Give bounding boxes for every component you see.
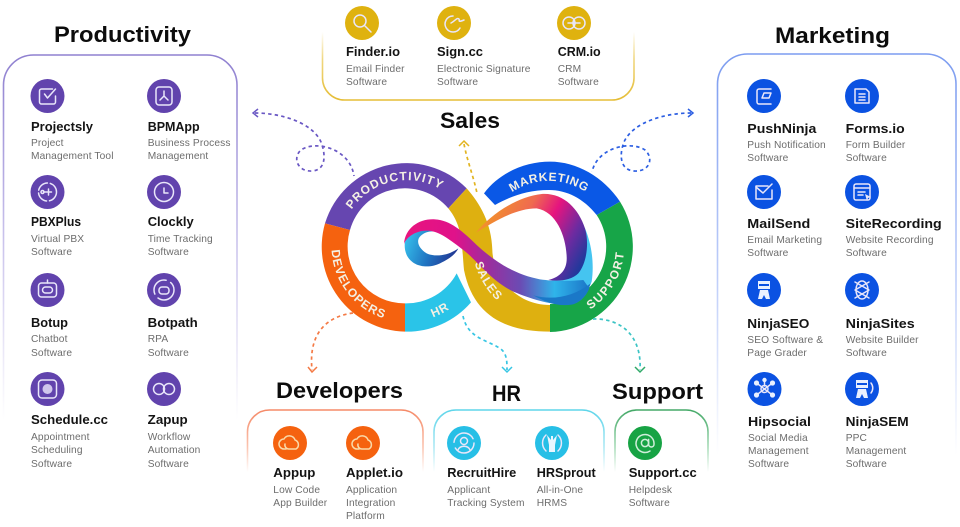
ribbon: crossing band: [404, 219, 589, 305]
icon: Applet.io: [346, 426, 380, 460]
icon: PBXPlus: [30, 175, 64, 209]
label: HR: HR: [430, 303, 449, 318]
item: Schedule.cc: Software: [31, 459, 72, 470]
icon: Appup: [273, 426, 307, 460]
item: Clockly: Software: [148, 247, 189, 258]
item: MailSend: [747, 175, 822, 259]
item: Zapup: Automation: [148, 445, 200, 456]
icon: Botup: [30, 273, 64, 307]
item: Botup: Chatbot: [31, 334, 68, 345]
item: Projectsly: Project: [31, 138, 64, 149]
arrow: to Sales: [459, 141, 477, 193]
item: Support.cc: Software: [629, 498, 670, 509]
item: Schedule.cc: Schedule.cc: [31, 412, 108, 427]
item: Botpath: [147, 273, 198, 359]
item: Projectsly: Projectsly: [31, 119, 94, 134]
heading: Developers: Developers: [276, 378, 403, 403]
item: NinjaSEM: [845, 372, 909, 470]
item: Hipsocial: Social Media: [748, 433, 808, 444]
item: NinjaSEO: Page Grader: [747, 348, 807, 359]
item: Zapup: Workflow: [148, 432, 191, 443]
item: Appup: Appup: [273, 465, 315, 480]
segment: Developers: [322, 223, 405, 332]
panel: Support: [615, 410, 708, 509]
item: CRM.io: CRM.io: [558, 44, 601, 59]
item: RecruitHire: RecruitHire: [447, 465, 516, 480]
icon: Botpath: [147, 273, 181, 307]
item: PushNinja: Push Notification: [747, 140, 826, 151]
icon: BPMApp: [147, 79, 181, 113]
ribbon: lower shadow: [533, 283, 591, 305]
icon: RecruitHire: [447, 426, 481, 460]
icon: Finder.io: [345, 6, 379, 40]
icon: Zapup: [147, 372, 181, 406]
icon: Projectsly: [30, 79, 64, 113]
item: MailSend: Email Marketing: [747, 235, 822, 246]
item: BPMApp: [147, 79, 231, 162]
panel: Productivity: [4, 55, 237, 470]
arrow: to Developers: [308, 313, 353, 372]
item: Zapup: [147, 372, 200, 470]
item: MailSend: Software: [747, 248, 789, 259]
item: Schedule.cc: [30, 372, 108, 470]
item: NinjaSEM: Management: [846, 446, 906, 457]
item: Sign.cc: Electronic Signature: [437, 64, 531, 75]
item: NinjaSEM: PPC: [846, 433, 867, 444]
item: Schedule.cc: Scheduling: [31, 445, 83, 456]
heading: Productivity: Productivity: [54, 22, 192, 47]
icon: NinjaSites: [845, 273, 879, 307]
icon: SiteRecording: [845, 175, 879, 209]
item: HRSprout: All-in-One: [537, 485, 583, 496]
item: Sign.cc: [437, 6, 531, 88]
icon: Support.cc: [628, 426, 662, 460]
item: Botup: Botup: [31, 315, 68, 330]
item: HRSprout: HRMS: [537, 498, 567, 509]
item: Botup: [30, 273, 72, 359]
panel: Developers: [248, 410, 423, 522]
icon: CRM.io: [557, 6, 591, 40]
icon: Schedule.cc: [30, 372, 64, 406]
panel: Marketing: [718, 54, 956, 470]
item: Sign.cc: Software: [437, 77, 478, 88]
item: SiteRecording: Software: [846, 248, 887, 259]
item: Clockly: [147, 175, 213, 258]
item: Applet.io: [346, 426, 403, 522]
item: MailSend: MailSend: [747, 216, 810, 231]
item: CRM.io: Software: [558, 77, 599, 88]
item: Applet.io: Applet.io: [346, 465, 403, 480]
item: Forms.io: Form Builder: [846, 140, 906, 151]
icon: Hipsocial: [748, 372, 782, 406]
icon: NinjaSEM: [845, 372, 879, 406]
item: PushNinja: [747, 79, 826, 164]
item: Support.cc: Helpdesk: [629, 485, 673, 496]
item: Finder.io: [345, 6, 405, 88]
icon: Sign.cc: [437, 6, 471, 40]
item: Forms.io: [845, 79, 906, 164]
item: NinjaSites: Software: [846, 348, 887, 359]
item: Appup: Low Code: [273, 485, 320, 496]
label: MARKETING: MARKETING: [508, 172, 588, 192]
item: PBXPlus: [30, 175, 84, 258]
item: PBXPlus: Software: [31, 247, 72, 258]
infinity loop graphic: [322, 162, 633, 332]
ribbon: left curl: [405, 227, 458, 266]
item: Forms.io: Software: [846, 153, 887, 164]
label: SUPPORT: SUPPORT: [586, 252, 624, 308]
item: SiteRecording: [845, 175, 942, 259]
item: NinjaSites: NinjaSites: [846, 316, 915, 331]
item: RecruitHire: Tracking System: [447, 498, 525, 509]
segment: Sales: [448, 188, 550, 332]
ribbon: right outer edge: [527, 228, 593, 294]
item: NinjaSEO: NinjaSEO: [747, 316, 809, 331]
item: SiteRecording: SiteRecording: [846, 216, 942, 231]
item: Forms.io: Forms.io: [846, 121, 905, 136]
item: NinjaSites: Website Builder: [846, 335, 919, 346]
item: Hipsocial: Management: [748, 446, 809, 457]
item: RecruitHire: Applicant: [447, 485, 490, 496]
label: PRODUCTIVITY: PRODUCTIVITY: [346, 172, 444, 209]
segment: Productivity: [325, 163, 467, 230]
panel: HR: [434, 410, 604, 509]
item: CRM.io: CRM: [558, 64, 581, 75]
icon: PushNinja: [747, 79, 781, 113]
heading: HR: HR: [492, 381, 521, 406]
segment: Support: [550, 202, 633, 332]
item: Support.cc: [628, 426, 697, 509]
item: RecruitHire: [447, 426, 525, 509]
arrow: to HR: [463, 316, 512, 372]
item: Hipsocial: Software: [748, 459, 789, 470]
item: Hipsocial: [748, 372, 811, 470]
item: PushNinja: PushNinja: [747, 121, 817, 136]
item: BPMApp: Management: [148, 151, 208, 162]
item: Finder.io: Email Finder: [346, 64, 405, 75]
item: NinjaSEM: NinjaSEM: [846, 414, 909, 429]
icon: Forms.io: [845, 79, 879, 113]
icon: NinjaSEO: [747, 273, 781, 307]
item: HRSprout: [535, 426, 596, 509]
item: PBXPlus: PBXPlus: [31, 214, 81, 229]
arrow: to Productivity: [253, 109, 354, 176]
item: Botup: Software: [31, 348, 72, 359]
item: Botpath: Software: [148, 348, 189, 359]
arrow: to Marketing: [592, 109, 693, 172]
icon: Clockly: [147, 175, 181, 209]
item: PushNinja: Software: [747, 153, 789, 164]
item: Applet.io: Integration: [346, 498, 395, 509]
item: Clockly: Time Tracking: [148, 234, 213, 245]
item: Finder.io: Software: [346, 77, 387, 88]
item: Applet.io: Platform: [346, 511, 385, 522]
item: Botpath: Botpath: [148, 315, 198, 330]
arrow: to Support: [593, 319, 645, 372]
item: Zapup: Software: [148, 459, 189, 470]
item: SiteRecording: Website Recording: [846, 235, 934, 246]
item: Schedule.cc: Appointment: [31, 432, 90, 443]
item: CRM.io: [557, 6, 601, 88]
item: NinjaSEO: SEO Software &: [747, 335, 823, 346]
label: DEVELOPERS: DEVELOPERS: [332, 250, 385, 318]
segment: HR: [405, 273, 471, 332]
label: SALES: SALES: [475, 262, 502, 300]
ribbon: right loop: [476, 194, 587, 281]
item: NinjaSites: [845, 273, 919, 359]
item: NinjaSEM: Software: [846, 459, 887, 470]
item: Applet.io: Application: [346, 485, 397, 496]
icon: HRSprout: [535, 426, 569, 460]
item: Botpath: RPA: [148, 334, 168, 345]
icon: MailSend: [747, 175, 781, 209]
item: Hipsocial: Hipsocial: [748, 414, 811, 429]
item: Projectsly: [30, 79, 114, 162]
heading: Sales: Sales: [440, 108, 500, 133]
item: BPMApp: BPMApp: [148, 119, 200, 134]
heading: Support: Support: [612, 379, 704, 404]
item: Clockly: Clockly: [148, 214, 194, 229]
item: PBXPlus: Virtual PBX: [31, 234, 84, 245]
item: NinjaSEO: [747, 273, 823, 359]
segment: Marketing: [484, 162, 620, 215]
item: Finder.io: Finder.io: [346, 44, 400, 59]
item: Appup: [273, 426, 328, 509]
item: Projectsly: Management Tool: [31, 151, 114, 162]
item: HRSprout: HRSprout: [537, 465, 596, 480]
item: Support.cc: Support.cc: [629, 465, 697, 480]
item: Zapup: Zapup: [148, 412, 188, 427]
panel: Sales: [322, 6, 634, 100]
heading: Marketing: Marketing: [775, 23, 890, 48]
item: BPMApp: Business Process: [148, 138, 231, 149]
item: Appup: App Builder: [273, 498, 328, 509]
item: Sign.cc: Sign.cc: [437, 44, 483, 59]
